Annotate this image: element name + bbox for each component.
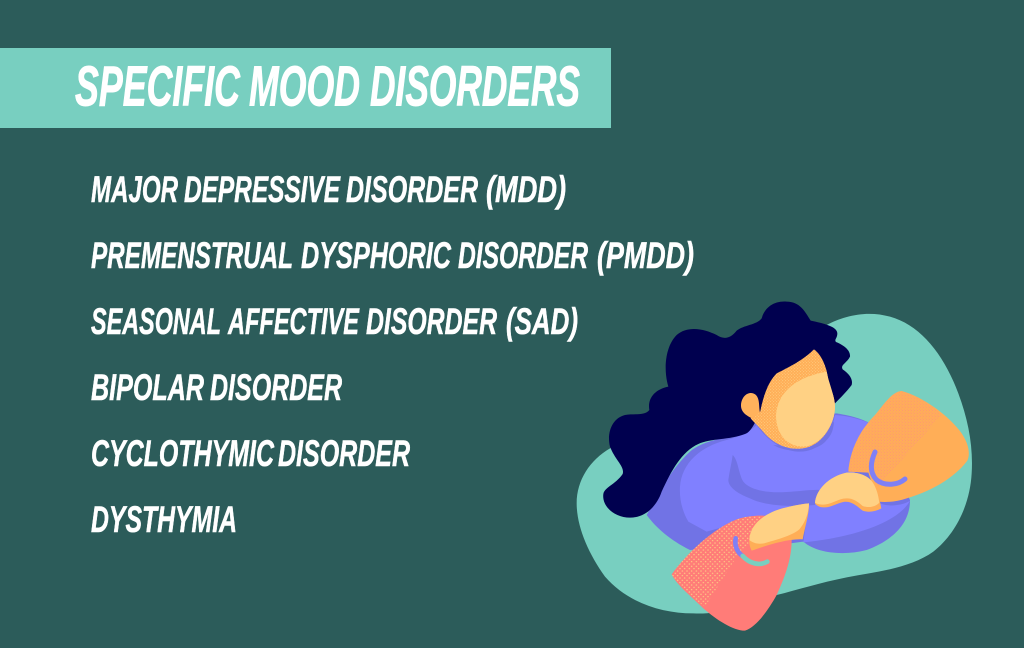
heading banner bbox=[0, 48, 611, 128]
list item: PMDD: DISORDER bbox=[458, 234, 588, 276]
right hand highlight bbox=[815, 472, 879, 507]
heading: SPECIFIC bbox=[75, 54, 241, 118]
heading bbox=[75, 54, 580, 118]
face bbox=[776, 372, 835, 447]
list item: dysthymia: DYSTHYMIA bbox=[91, 498, 237, 540]
teal blob bbox=[577, 314, 972, 614]
right hand bbox=[815, 472, 881, 512]
left cup tube teal bbox=[743, 556, 767, 564]
collar shadow bbox=[773, 422, 834, 451]
face shadow stipple bbox=[751, 349, 835, 449]
sweater fold bbox=[728, 455, 822, 506]
left cup tube purple bbox=[735, 538, 743, 556]
right pump cup bbox=[848, 391, 969, 502]
heading: DISORDERS bbox=[370, 54, 580, 118]
right cup stipple bbox=[848, 391, 942, 487]
list item: MDD: DISORDER bbox=[346, 168, 478, 210]
sweater bbox=[647, 413, 910, 553]
list item: PMDD: DYSPHORIC bbox=[301, 234, 452, 276]
list item: cyclothymic: CYCLOTHYMIC bbox=[91, 432, 275, 474]
list item: bipolar: BIPOLAR bbox=[91, 366, 204, 408]
left pump cup bbox=[672, 516, 792, 631]
list item: PMDD bbox=[91, 234, 694, 276]
heading: MOOD bbox=[249, 54, 360, 118]
list item: bipolar: DISORDER bbox=[210, 366, 342, 408]
right cup tube bbox=[871, 452, 905, 484]
list item: MDD bbox=[91, 168, 566, 210]
list item: bipolar bbox=[91, 366, 342, 408]
ear bbox=[741, 393, 767, 422]
list item: MDD: DEPRESSIVE bbox=[184, 168, 341, 210]
illustration: woman holding breast pump cups bbox=[577, 302, 972, 631]
list item: PMDD: PREMENSTRUAL bbox=[91, 234, 293, 276]
left cup stipple bbox=[672, 516, 763, 607]
hair bbox=[603, 302, 852, 518]
list item: PMDD: (PMDD) bbox=[597, 234, 694, 276]
list item: SAD bbox=[91, 300, 578, 342]
list item: SAD: DISORDER bbox=[366, 300, 497, 342]
list item: cyclothymic: DISORDER bbox=[278, 432, 410, 474]
list item: SAD: (SAD) bbox=[506, 300, 578, 342]
left hand bbox=[749, 503, 809, 551]
list item: MDD: MAJOR bbox=[91, 168, 178, 210]
list of mood disorders bbox=[91, 168, 694, 540]
list item: MDD: (MDD) bbox=[486, 168, 566, 210]
left hand highlight bbox=[749, 503, 809, 544]
list item: SAD: SEASONAL bbox=[91, 300, 221, 342]
list item: SAD: AFFECTIVE bbox=[227, 300, 360, 342]
face shadow bbox=[751, 349, 835, 449]
sweater highlight bbox=[680, 415, 910, 542]
